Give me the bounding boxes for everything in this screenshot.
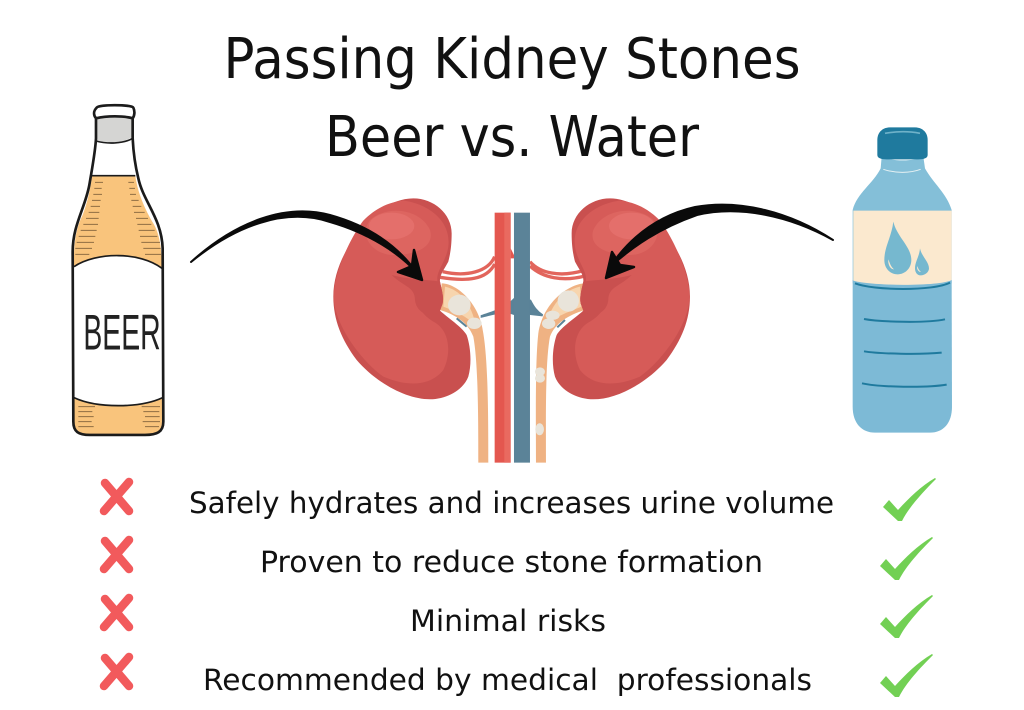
icon: green check — [880, 537, 933, 580]
right ureter — [536, 283, 585, 463]
icon: red cross — [104, 657, 129, 686]
renal vessels — [440, 257, 585, 327]
icon: water drops — [884, 222, 911, 274]
left kidney — [333, 198, 470, 399]
icon: green check — [883, 478, 936, 521]
icon: green check — [880, 595, 933, 638]
row text: Proven to reduce stone formation — [260, 545, 763, 579]
bottle cap — [877, 127, 928, 159]
comparison row 2 — [104, 537, 933, 580]
icon: green check — [880, 654, 933, 697]
row text: Minimal risks — [410, 604, 606, 638]
icon: kidneys and blood vessels — [333, 198, 690, 463]
comparison row 1 — [104, 478, 936, 521]
title — [224, 27, 800, 170]
bottle label — [853, 211, 952, 285]
kidney stones — [448, 290, 579, 435]
row text: Recommended by medical professionals — [203, 663, 812, 697]
comparison row 3 — [104, 595, 933, 638]
comparison row 4 — [104, 654, 933, 697]
title: Beer vs. Water — [325, 105, 700, 170]
icon: red cross — [104, 482, 129, 511]
icon: red cross — [104, 598, 129, 627]
hatch shading — [75, 182, 161, 427]
arrow: water to kidney — [606, 205, 833, 278]
row text: Safely hydrates and increases urine volume — [189, 486, 834, 520]
aorta — [495, 213, 511, 463]
bottle label text: BEER — [83, 305, 161, 361]
left ureter — [440, 283, 488, 463]
arrow: beer to kidney — [191, 211, 422, 280]
icon: beer bottle — [73, 105, 163, 435]
title: Passing Kidney Stones — [224, 27, 800, 92]
right kidney — [553, 198, 690, 399]
icon: red cross — [104, 540, 129, 569]
icon: water bottle — [853, 127, 952, 433]
vena cava — [514, 213, 530, 463]
